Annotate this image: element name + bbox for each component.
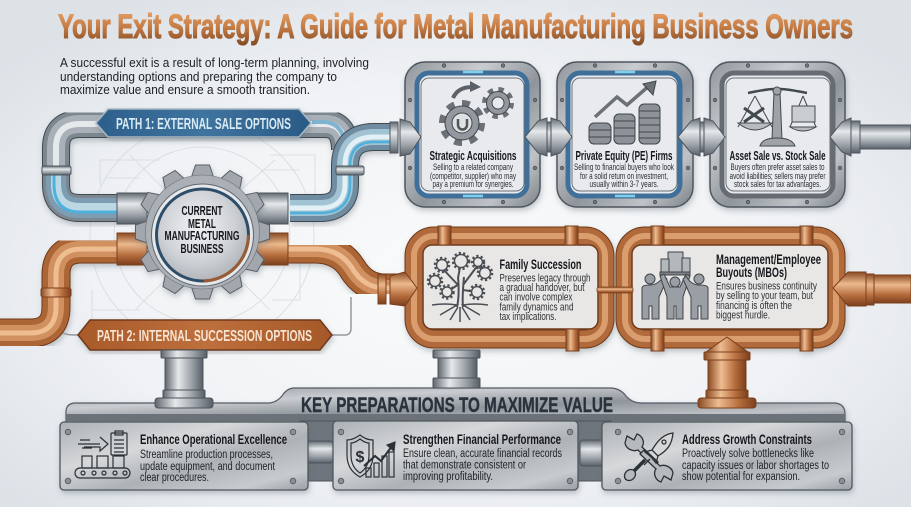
card text: Buyers often prefer asset sales to [730,162,824,172]
icon: wrenches and rocket [622,433,673,483]
card text: financing is often the [716,300,792,312]
icon: gears with magnet [443,81,511,142]
card text [716,280,817,322]
card text: pay a premium for synergies. [432,179,514,189]
panel: enhance operational excellence [60,422,308,490]
card text: avoid liabilities; sellers may prefer [730,171,826,181]
icon: shield with dollar and chart [347,435,395,477]
gear label: CURRENT [182,203,223,218]
card text: Selling to a related company [433,162,513,172]
card text: family dynamics and [500,302,574,314]
panel text: show potential for expansion. [682,471,800,483]
copper pipe: internal path, left [0,249,140,333]
panel: address growth constraints [602,422,852,490]
panel title: Enhance Operational Excellence [140,432,287,447]
panel: strengthen financial performance [333,421,578,490]
panel text: that demonstrate consistent or [403,460,526,472]
copper connector to key preparations [698,337,756,408]
panel text: improving profitability. [403,471,493,483]
card text: biggest hurdle. [716,310,770,322]
card: private equity [557,62,693,207]
icon: team lifting building [642,252,708,319]
panel title: Strengthen Financial Performance [403,432,561,447]
card title: Strategic Acquisitions [430,149,517,163]
panel text [140,449,276,484]
band joining copper cards [597,287,633,293]
gear label: MANUFACTURING [164,228,240,243]
gear label: BUSINESS [180,241,224,256]
card title: Buyouts (MBOs) [716,265,787,280]
connectors between preparation panels [300,421,611,481]
copper cones and outgoing pipe [378,272,911,306]
card text: by selling to your team, but [716,290,813,302]
connector cones on steel cards and outgoing pipe [390,118,911,156]
pipe couplings and clamps [41,166,364,297]
copper pipe: internal path, right [262,249,400,288]
panel text [403,448,562,483]
panel title: Address Growth Constraints [682,432,812,447]
banner: path 2 [78,320,332,350]
card text [430,162,516,189]
panel text: clear procedures. [140,472,209,484]
card text: Selling to financial buyers who look [574,162,674,172]
gear teeth [136,165,270,299]
card text: a gradual handover, but [500,282,584,294]
card text: (competitor, supplier) who may [430,171,516,181]
intro text: A successful exit is a result of long-term planning, involving [60,56,369,70]
card title: Private Equity (PE) Firms [576,149,673,163]
gear label: METAL [188,216,216,231]
steel pipe: external path loop [54,122,396,213]
card: management buyouts [625,226,836,351]
panel text: Ensure clean, accurate financial records [403,448,562,460]
panel text: Proactively solve bottlenecks like [682,448,814,460]
base plate with header tab [66,388,845,422]
card: family succession [414,226,605,351]
card: strategic acquisitions [405,62,540,207]
icon: conveyor and checklist [75,431,130,478]
icon text: dollar sign: $ [356,449,365,466]
intro text: understanding options and preparing the company to [60,70,337,84]
gear label [164,203,240,256]
icon: gear tree [428,253,492,322]
card: asset vs stock sale [710,62,845,207]
card text: tax implications. [500,311,556,323]
card text [574,162,674,189]
clamps [438,226,579,351]
panel text: update equipment, and document [140,461,276,473]
section heading: KEY PREPARATIONS TO MAXIMIZE VALUE [301,394,613,417]
icon: balance scale [738,87,816,146]
blueprint lines behind the gear [90,123,315,347]
panel text: Streamline production processes, [140,449,273,461]
banner: path 1 [96,109,311,137]
card text [730,162,826,189]
card text [500,272,590,323]
card text: Ensures business continuity [716,280,817,292]
banner: path 2: PATH 2: INTERNAL SUCCESSION OPTIONS [97,328,312,345]
steel connector to key preparations [433,350,480,388]
card text: for a solid return on investment, [580,171,668,181]
card text: can involve complex [500,292,573,304]
icon: coins with rising arrow [589,81,660,144]
card title: Asset Sale vs. Stock Sale [730,149,826,163]
gear: current business [136,165,270,299]
intro text [60,56,369,97]
card title [716,252,821,280]
banner: path 1: PATH 1: EXTERNAL SALE OPTIONS [116,116,291,133]
clamps [651,226,813,351]
steel connector to family succession [155,350,213,408]
thin connector line to path 2 banner [63,297,351,335]
card text: Preserves legacy through [500,272,590,284]
card title: Management/Employee [716,252,821,267]
panel text: capacity issues or labor shortages to [682,460,829,472]
intro text: maximize value and ensure a smooth transition. [60,83,310,97]
card text: stock sales for tax advantages. [734,179,821,189]
card text: usually within 3-7 years. [590,179,658,189]
card title: Family Succession [500,257,582,272]
panel text [682,448,829,483]
